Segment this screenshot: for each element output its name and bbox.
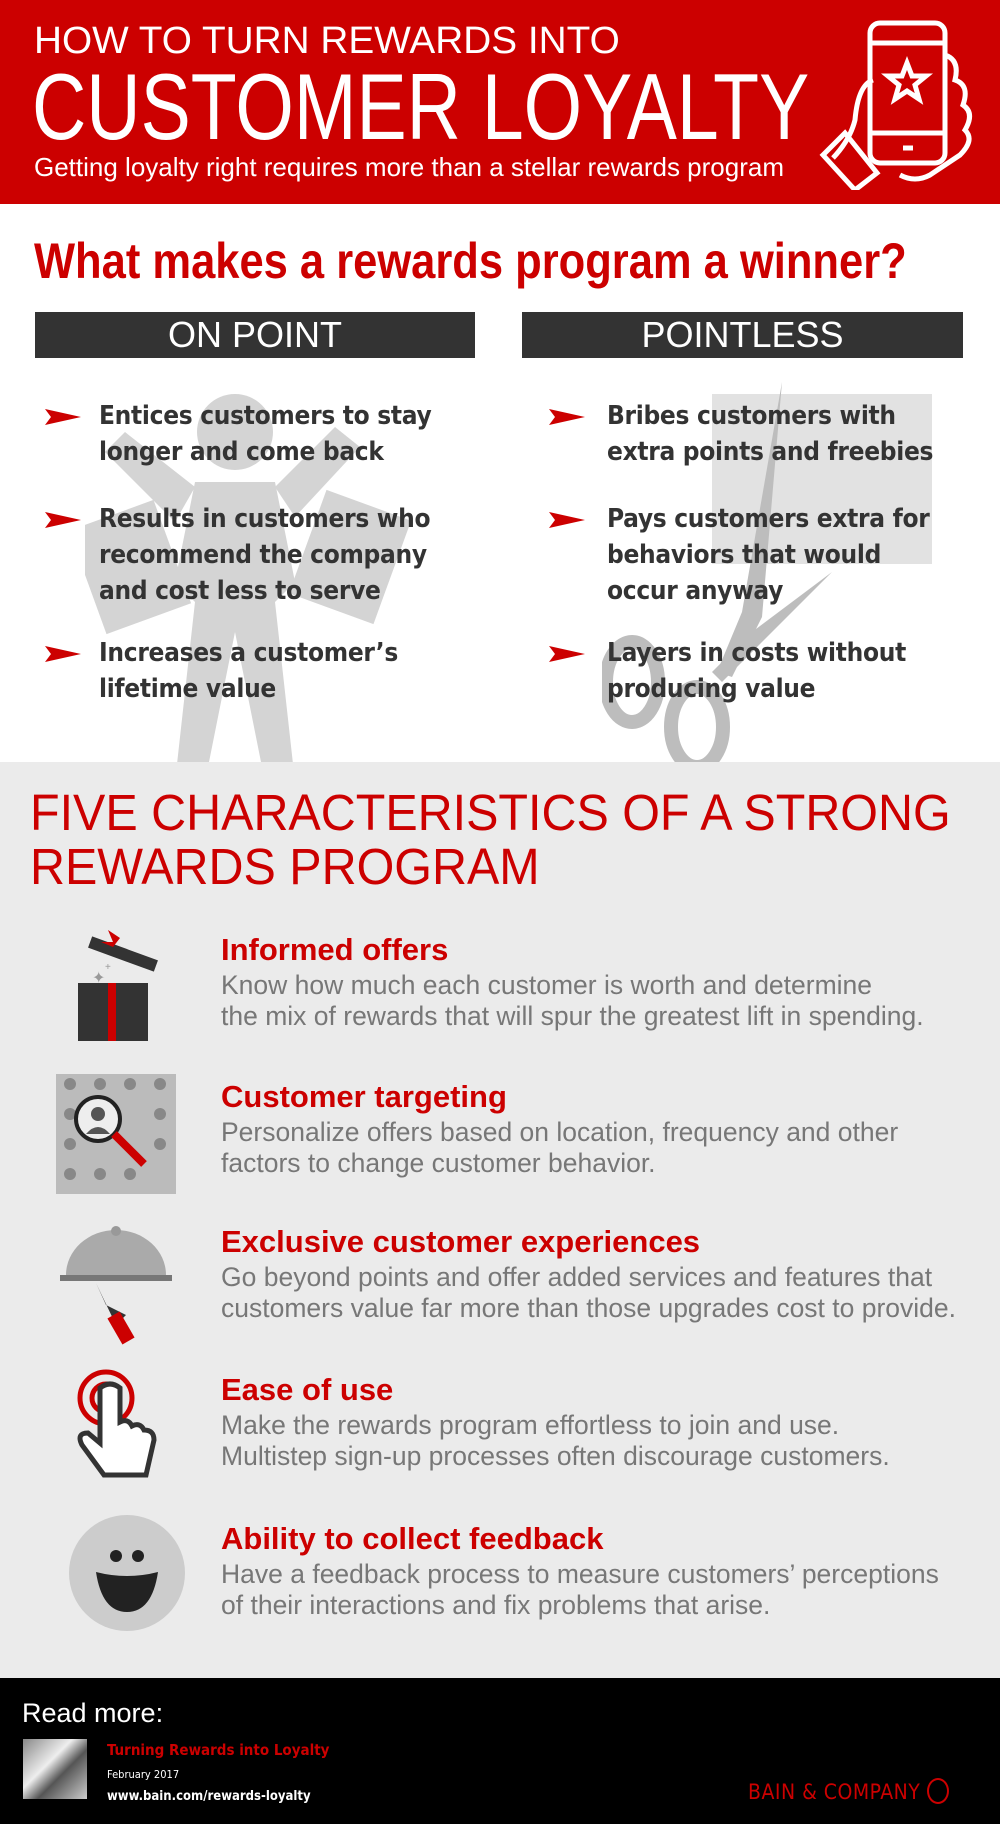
item: customer targeting: Personalize offers based on location, frequency and other xyxy=(221,1117,898,1147)
read more: Read more: xyxy=(22,1698,163,1728)
item: customer targeting xyxy=(221,1079,898,1178)
panel: pointless: Bribes customers with extra points and freebies xyxy=(607,401,933,467)
icon: gift box: + xyxy=(105,962,111,973)
item: ease of use xyxy=(221,1372,890,1471)
item: feedback: Have a feedback process to measure customers’ perceptions xyxy=(221,1559,939,1589)
item: informed offers: Informed offers xyxy=(221,932,448,967)
item: exclusive experiences: Go beyond points and offer added services and features that xyxy=(221,1262,932,1292)
thumbnail xyxy=(23,1739,87,1799)
icon: customer grid with magnifier xyxy=(56,1074,176,1194)
icon: smiley xyxy=(69,1515,185,1631)
icon: pointing finger xyxy=(78,1370,156,1478)
item: informed offers: Know how much each customer is worth and determine xyxy=(221,970,872,1000)
item: feedback xyxy=(221,1521,939,1620)
background figure xyxy=(85,394,409,762)
item: exclusive experiences: customers value far more than those upgrades cost to provide. xyxy=(221,1293,956,1323)
item: feedback: Ability to collect feedback xyxy=(221,1521,603,1556)
item: exclusive experiences xyxy=(221,1224,956,1323)
icon: hand holding phone xyxy=(820,20,972,190)
report link xyxy=(107,1741,330,1804)
report link: www.bain.com/rewards-loyalty xyxy=(107,1789,311,1804)
item: ease of use: Ease of use xyxy=(221,1372,393,1407)
item: feedback: of their interactions and fix problems that arise. xyxy=(221,1590,770,1620)
header bar on point xyxy=(35,312,475,358)
header title large: CUSTOMER LOYALTY xyxy=(32,54,809,159)
panel: pointless: Pays customers extra for behaviors that would occur anyway xyxy=(607,504,929,606)
header bar pointless: POINTLESS xyxy=(641,314,844,355)
bullet 2 xyxy=(549,504,930,606)
header banner xyxy=(0,0,1000,204)
item: customer targeting: Customer targeting xyxy=(221,1079,507,1114)
bullet 3 xyxy=(45,638,398,704)
icon: gift box: ✦ xyxy=(92,970,105,987)
item: informed offers: the mix of rewards that will spur the greatest lift in spending. xyxy=(221,1001,924,1031)
bullet 2 xyxy=(45,504,430,606)
section heading xyxy=(30,784,951,895)
panel: pointless xyxy=(522,312,963,762)
header bar pointless xyxy=(522,312,963,358)
icon: cloche xyxy=(60,1226,172,1344)
item: ease of use: Multistep sign-up processes often discourage customers. xyxy=(221,1441,890,1471)
footer xyxy=(0,1678,1000,1824)
section heading: FIVE CHARACTERISTICS OF A STRONG xyxy=(30,784,951,841)
item: customer targeting: factors to change customer behavior. xyxy=(221,1148,656,1178)
panel: on point: Entices customers to stay longer and come back xyxy=(99,401,431,467)
bullet 1 xyxy=(549,401,933,467)
bullet 1 xyxy=(45,401,432,467)
background: coupon and scissors xyxy=(602,382,932,762)
report link: February 2017 xyxy=(107,1768,179,1781)
bullet 3 xyxy=(549,638,906,704)
logo: bain & company: BAIN & COMPANY xyxy=(748,1780,920,1804)
header bar on point: ON POINT xyxy=(168,314,342,355)
panel: pointless: Layers in costs without producing value xyxy=(607,638,906,704)
item: ease of use: Make the rewards program effortless to join and use. xyxy=(221,1410,839,1440)
item: informed offers xyxy=(221,932,924,1031)
header title small: HOW TO TURN REWARDS INTO xyxy=(34,20,620,62)
item: exclusive experiences: Exclusive customer experiences xyxy=(221,1224,700,1259)
panel: on point: Results in customers who recommend the company and cost less to serve xyxy=(99,504,430,606)
subtitle: Getting loyalty right requires more than a stellar rewards program xyxy=(34,152,784,182)
report link: Turning Rewards into Loyalty xyxy=(107,1741,329,1759)
section heading: REWARDS PROGRAM xyxy=(30,838,540,895)
icon: gift box xyxy=(78,930,158,1041)
panel: on point: Increases a customer’s lifetime value xyxy=(99,638,398,704)
heading: what makes a winner: What makes a rewards program a winner? xyxy=(34,233,907,289)
panel: on point xyxy=(35,312,475,762)
panel: five characteristics xyxy=(0,762,1000,1678)
